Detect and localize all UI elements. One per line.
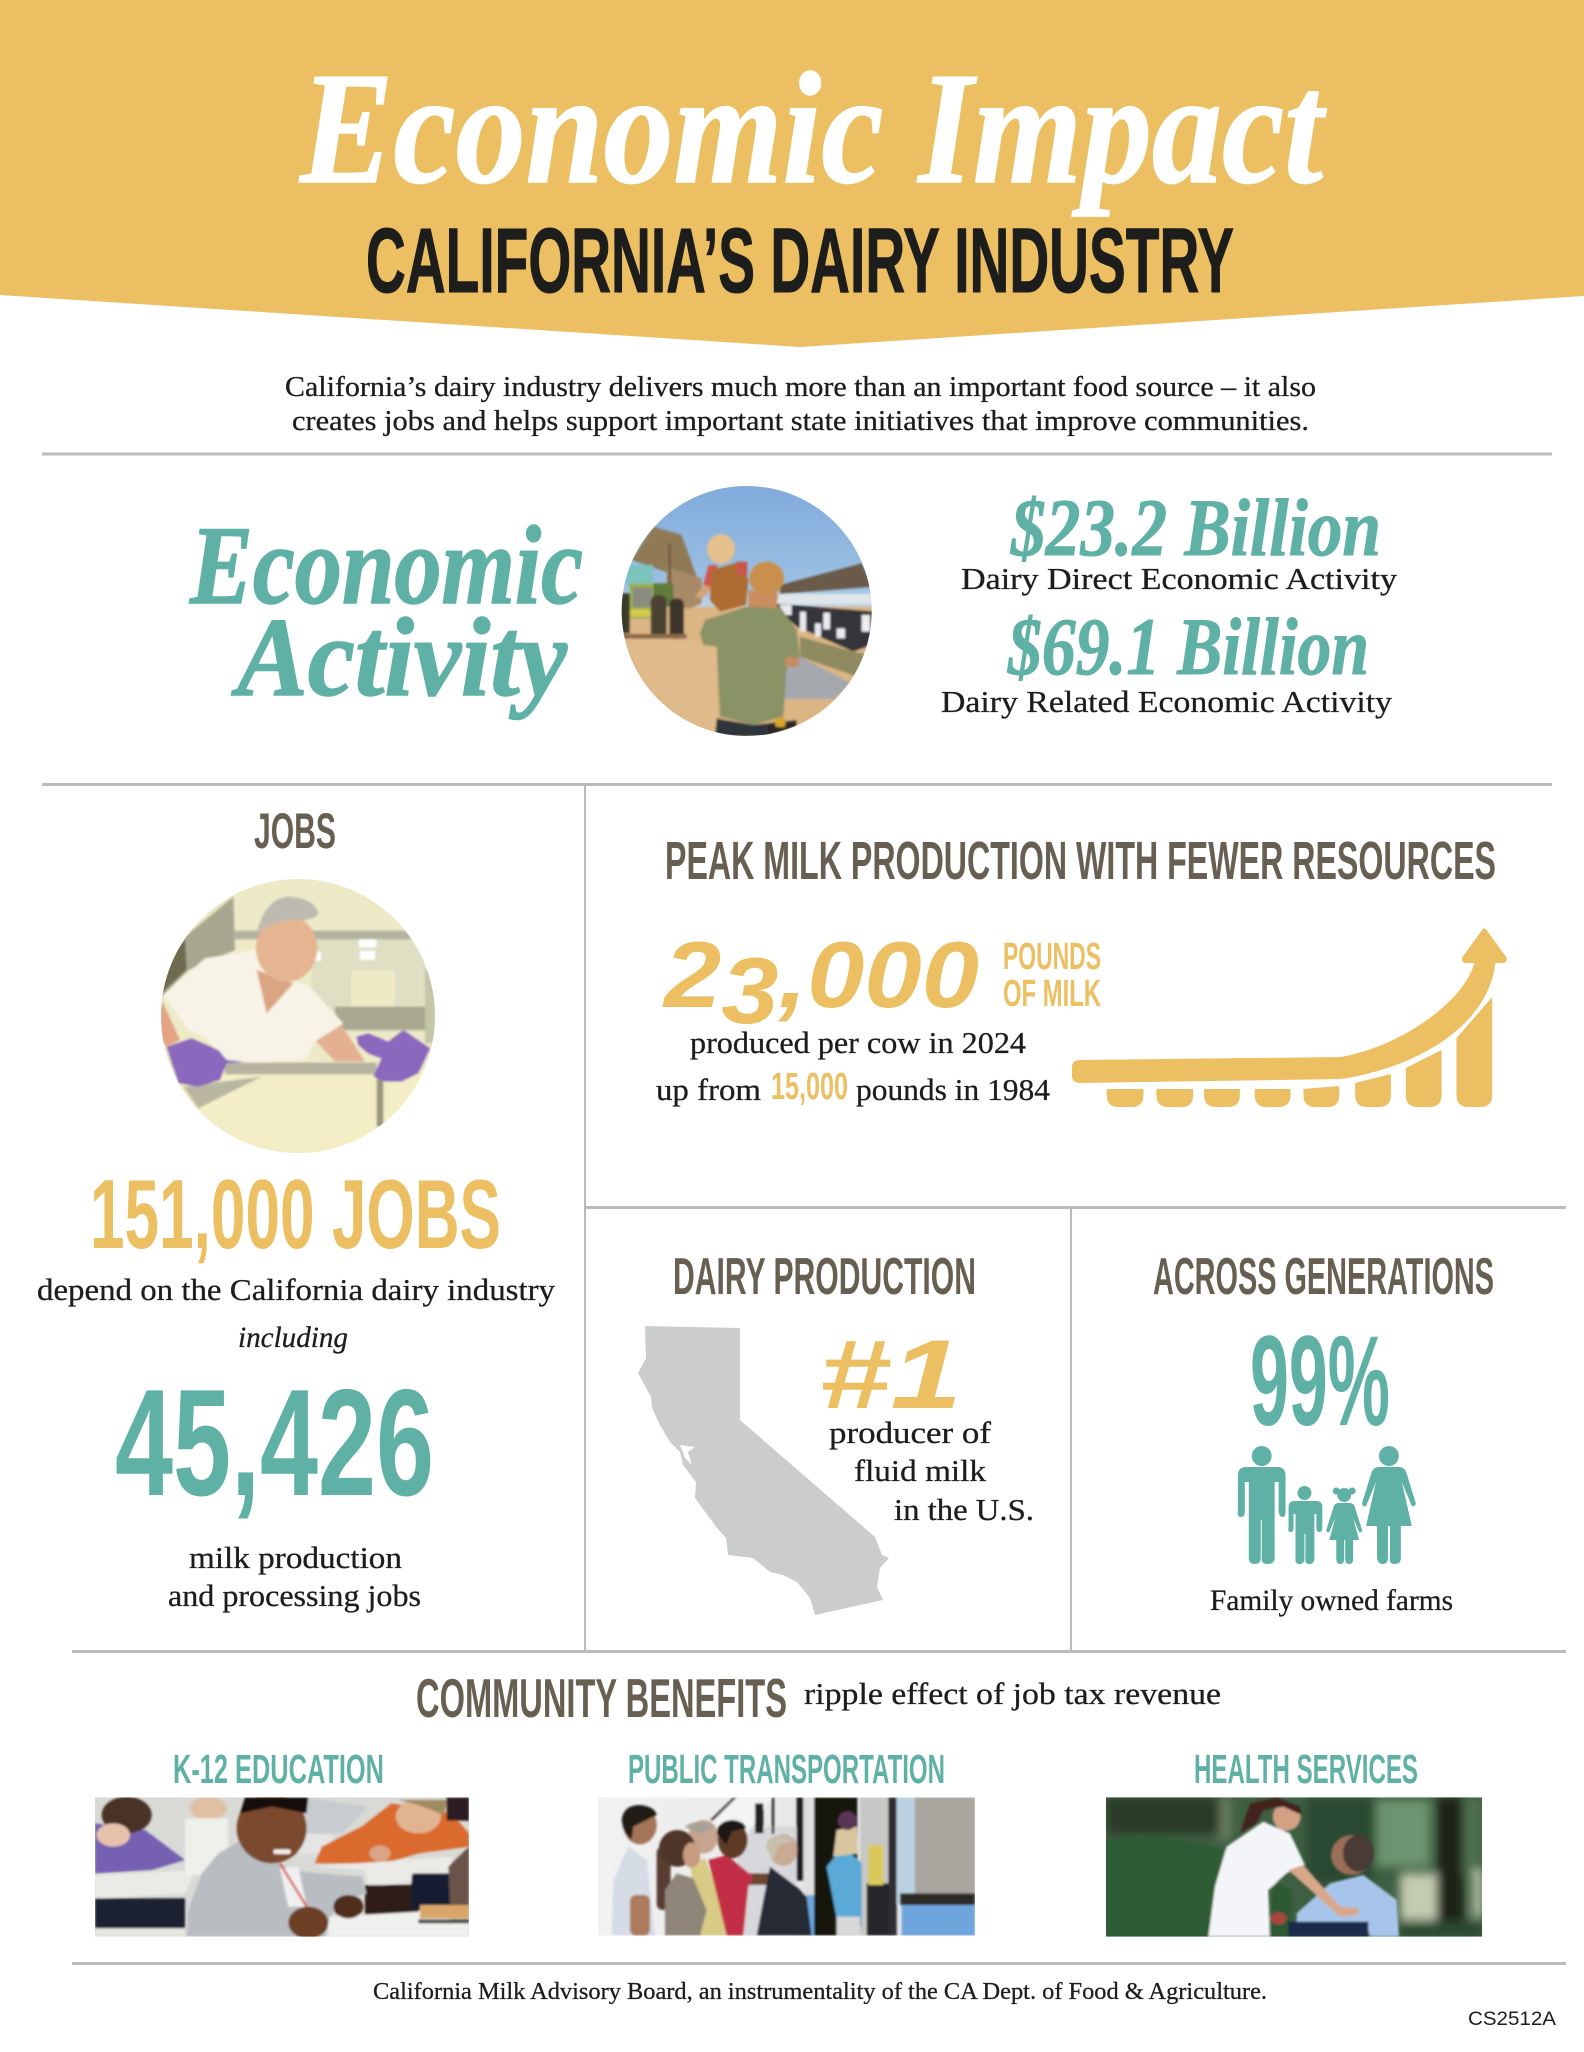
text: ripple effect: ripple effect of job tax revenue bbox=[804, 1676, 1221, 1711]
photo: classroom bbox=[95, 1793, 469, 1939]
intro text: California’s dairy industry delivers much more than an important food source – it also bbox=[285, 372, 1316, 403]
stat: 23,000: 2 bbox=[664, 922, 716, 1027]
icon: family bbox=[1238, 1446, 1416, 1564]
community benefits heading: COMMUNITY BENEFITS bbox=[416, 1667, 787, 1729]
title: Economic Impact: Economic Impact bbox=[298, 39, 1327, 217]
panel: community benefits bbox=[95, 1667, 1482, 1939]
panel: dairy production bbox=[638, 1248, 1034, 1615]
text: produced per cow: pounds in 1984 bbox=[856, 1072, 1050, 1107]
document code: CS2512A bbox=[1468, 2009, 1556, 2030]
label: pounds of milk: OF MILK bbox=[1003, 973, 1101, 1015]
text: producer of fluid milk: fluid milk bbox=[854, 1453, 987, 1488]
intro text: creates jobs and helps support important state initiatives that improve communities. bbox=[292, 406, 1309, 437]
chart: rising bars with arrow bbox=[1072, 928, 1507, 1107]
label: pounds of milk: POUNDS bbox=[1003, 936, 1101, 978]
text: family owned farms: Family owned farms bbox=[1210, 1584, 1453, 1617]
text: depend on: depend on the California dairy industry bbox=[37, 1272, 556, 1307]
economic activity heading: Activity bbox=[231, 596, 568, 720]
footer text: California Milk Advisory Board, an instrumentality of the CA Dept. of Food & Agriculture. bbox=[373, 1979, 1267, 2005]
header banner bbox=[0, 0, 1584, 347]
panel: peak milk production bbox=[656, 831, 1507, 1108]
panel: economic activity bbox=[189, 482, 1398, 740]
stat: 99%: 99% bbox=[1250, 1310, 1390, 1453]
label: health services: HEALTH SERVICES bbox=[1194, 1746, 1418, 1792]
stat: related activity bbox=[941, 601, 1393, 719]
text: milk production jobs: and processing jobs bbox=[168, 1578, 421, 1613]
stat: 45,426: 45,426 bbox=[115, 1358, 434, 1528]
stat: direct activity: Dairy Direct Economic Activity bbox=[961, 561, 1398, 596]
map: California bbox=[638, 1326, 889, 1615]
stat: 23,000: 3 bbox=[721, 938, 779, 1043]
text: milk production jobs: milk production bbox=[189, 1540, 403, 1575]
text: produced per cow: up from bbox=[656, 1072, 761, 1107]
label: K-12 education: K-12 EDUCATION bbox=[173, 1746, 384, 1792]
text: milk production jobs bbox=[168, 1540, 421, 1613]
stat: direct activity bbox=[961, 482, 1398, 596]
jobs heading: JOBS bbox=[254, 803, 336, 859]
economic activity heading: Economic bbox=[189, 504, 583, 628]
panel: jobs bbox=[37, 803, 556, 1613]
photo: nurse and patient bbox=[1106, 1797, 1482, 1937]
text: produced per cow: 15,000 bbox=[771, 1066, 848, 1108]
text: producer of fluid milk: producer of bbox=[829, 1415, 992, 1450]
text: produced per cow: produced per cow in 2024 bbox=[690, 1025, 1027, 1060]
stat: direct activity: $23.2 Billion bbox=[1010, 482, 1381, 573]
economic activity heading bbox=[189, 504, 583, 720]
label: pounds of milk bbox=[1003, 936, 1101, 1015]
stat: related activity: Dairy Related Economic Activity bbox=[941, 684, 1393, 719]
text: producer of fluid milk: in the U.S. bbox=[894, 1492, 1034, 1527]
photo: bus passengers bbox=[598, 1797, 975, 1936]
stat: related activity: $69.1 Billion bbox=[1007, 601, 1369, 692]
intro text bbox=[285, 372, 1316, 437]
text: including: including bbox=[238, 1321, 348, 1354]
stat: 151,000 jobs: 151,000 JOBS bbox=[90, 1159, 501, 1269]
panel: across generations bbox=[1153, 1248, 1494, 1617]
photo: dairy worker bbox=[161, 879, 435, 1153]
text: produced per cow bbox=[656, 1025, 1050, 1108]
stat: #1: #1 bbox=[819, 1319, 962, 1429]
photo: farmer with child and cows bbox=[620, 483, 877, 740]
label: public transportation: PUBLIC TRANSPORTATION bbox=[628, 1746, 945, 1792]
dairy production heading: DAIRY PRODUCTION bbox=[673, 1248, 976, 1306]
stat: 23,000: ,000 bbox=[777, 922, 979, 1027]
text: producer of fluid milk bbox=[829, 1415, 1034, 1527]
